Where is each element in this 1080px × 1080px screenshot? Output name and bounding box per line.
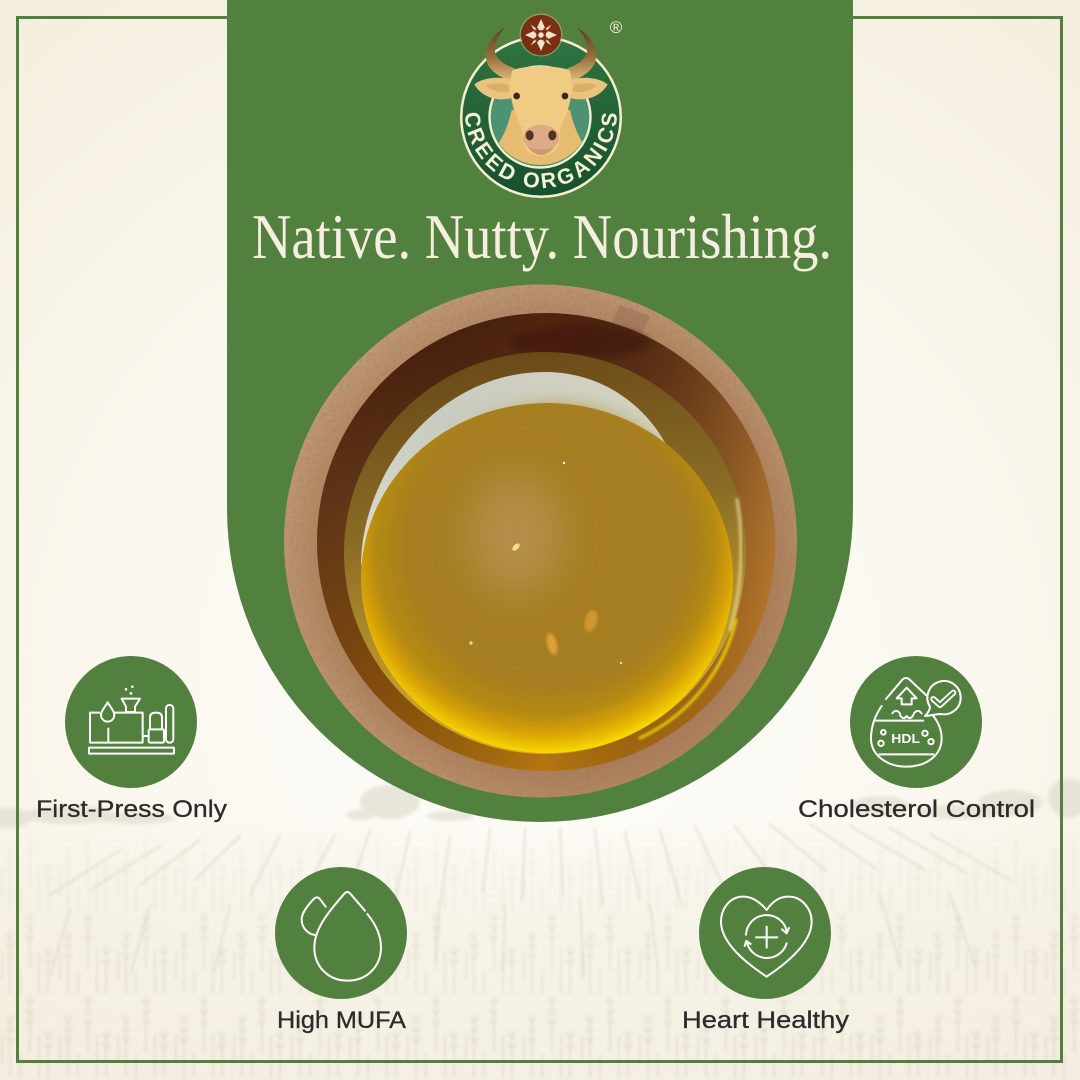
label: Cholesterol Control xyxy=(798,796,1035,823)
label: High MUFA xyxy=(277,1007,406,1034)
label: Heart Healthy xyxy=(682,1007,849,1034)
feature: First-Press Only xyxy=(36,656,227,823)
label: First-Press Only xyxy=(36,796,227,823)
icon: HDL drop with check xyxy=(871,678,961,767)
icon: heart with plus xyxy=(721,897,812,977)
wooden rim xyxy=(284,284,797,798)
panel: green arch xyxy=(227,0,853,822)
golden oil pool xyxy=(361,403,733,753)
icon circle xyxy=(850,656,982,788)
feature: Heart Healthy xyxy=(682,867,849,1034)
oil surface xyxy=(344,352,746,754)
registered mark: ® xyxy=(610,18,623,37)
icon circle xyxy=(275,867,407,999)
bowl of oil xyxy=(284,284,797,798)
icon: oil press machine xyxy=(89,685,174,754)
wheat field xyxy=(66,889,1013,1080)
logo ring xyxy=(460,36,622,198)
icon: oil drops xyxy=(302,892,381,981)
white reflection crescent xyxy=(361,372,680,565)
logo: Creed Organics xyxy=(460,14,623,198)
logo emblem xyxy=(520,14,562,56)
bright rim highlights xyxy=(640,500,741,738)
title: Native. Nutty. Nourishing. xyxy=(252,202,832,272)
icon circle xyxy=(699,867,831,999)
light specks on oil xyxy=(469,462,622,664)
icon: HDL drop with check: HDL xyxy=(891,732,920,746)
logo cow xyxy=(474,27,608,165)
icon circle xyxy=(65,656,197,788)
inner wall xyxy=(317,313,775,771)
feature: High MUFA xyxy=(275,867,407,1034)
distant tree line xyxy=(0,778,1080,828)
logo wordmark: CREED ORGANICS xyxy=(465,112,617,188)
feature: Cholesterol Control xyxy=(798,656,1035,823)
